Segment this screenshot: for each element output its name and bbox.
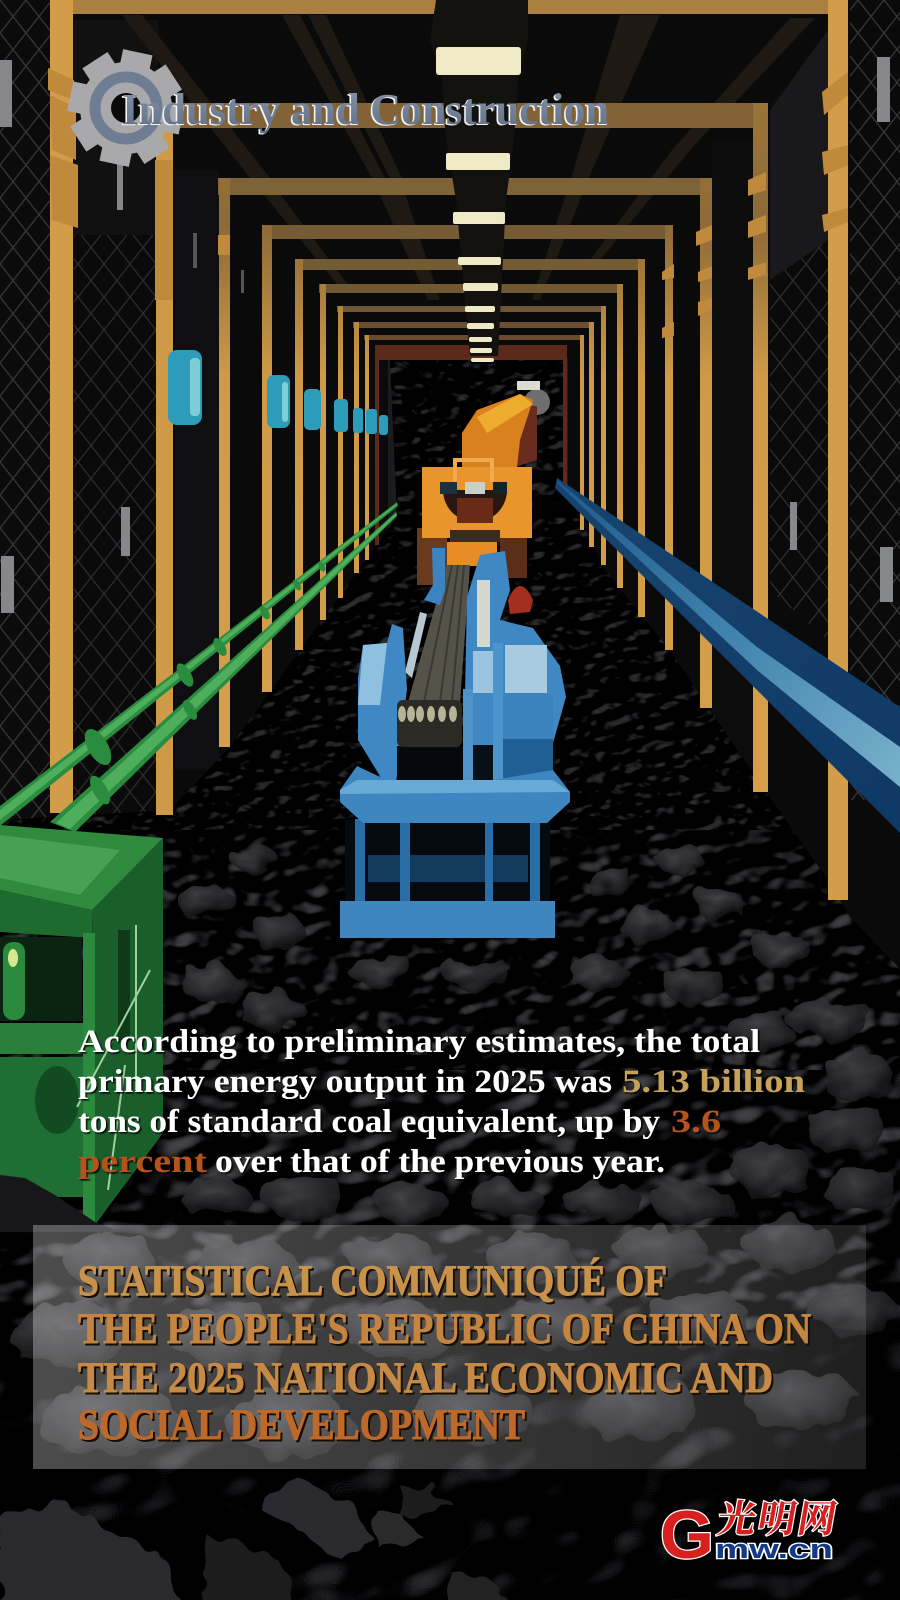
frame 9: [364, 335, 584, 560]
blue conveyor machine: [340, 548, 570, 823]
small blue roller left: [424, 548, 445, 605]
frame 5: [295, 259, 645, 650]
teal wall lamps: [168, 350, 388, 435]
conveyor base plate: [340, 901, 555, 938]
gear icon: [58, 40, 194, 176]
body paragraph: According to preliminary estimates, the total: [78, 1024, 760, 1060]
orange mining machine: [417, 381, 550, 585]
logo: gmw.cn: mw.cn: [715, 1534, 833, 1564]
banner heading: [78, 1258, 811, 1449]
legs: [417, 528, 447, 585]
body paragraph: primary energy output in 2025 was: [78, 1064, 612, 1100]
white bar: [477, 580, 490, 647]
logo: gmw.cn: 光明网: [714, 1498, 840, 1541]
frame 6: [319, 284, 623, 620]
green cabinet: [0, 825, 163, 1225]
blue rail: [555, 478, 900, 833]
logo: gmw.cn: G: [660, 1497, 714, 1573]
frame 2: [155, 103, 768, 815]
highlight: percent: percent: [78, 1144, 207, 1180]
conveyor belt: [408, 565, 470, 702]
frame 3: [218, 178, 712, 747]
banner heading: THE 2025 NATIONAL ECONOMIC AND: [78, 1355, 773, 1402]
machine arm: [462, 381, 550, 467]
drum: [397, 700, 462, 747]
highlight: 3.6: 3.6: [671, 1104, 721, 1140]
body paragraph: [78, 1024, 805, 1180]
post cleats: [48, 68, 848, 338]
frame 7: [337, 306, 606, 598]
highlight: 5.13 billion: 5.13 billion: [622, 1064, 805, 1100]
body paragraph: tons of standard coal equivalent, up by: [78, 1104, 661, 1140]
banner heading: THE PEOPLE'S REPUBLIC OF CHINA ON: [78, 1306, 811, 1353]
large coal chunks at the bottom: [0, 1480, 510, 1600]
frame 10 red far end: [375, 345, 567, 545]
ceiling lights: [436, 47, 521, 362]
ceiling light fixture housing: [430, 0, 528, 356]
frame 8: [353, 322, 594, 573]
red shield: [508, 586, 533, 614]
frame 1: [50, 0, 848, 900]
conveyor base legs: [345, 819, 550, 905]
cavity under drum: [397, 746, 463, 786]
right hood: [463, 551, 566, 792]
ceiling slats converging to the vanishing point: [122, 15, 815, 300]
silver bar: [405, 612, 427, 678]
machine body: [422, 460, 532, 566]
dark coal pile bottom left: [0, 1175, 120, 1232]
coal floor: [0, 360, 900, 1600]
light blocks: [505, 645, 547, 693]
logo: gmw.cn: [660, 1497, 840, 1573]
coal pile at the far end of the tunnel: [388, 358, 568, 528]
wall plates: [0, 57, 893, 613]
platform: [340, 766, 570, 823]
title: Industry and Construction: [122, 85, 609, 134]
body paragraph: over that of the previous year.: [215, 1144, 665, 1180]
individual coal lumps on the floor: [14, 847, 896, 1459]
left and right walls with wire mesh: [0, 0, 900, 830]
left housing: [358, 624, 407, 792]
green pipes: [0, 502, 398, 832]
frame 4: [262, 225, 673, 692]
translucent heading banner: [33, 1225, 866, 1469]
banner heading: SOCIAL DEVELOPMENT: [78, 1402, 525, 1449]
banner heading: STATISTICAL COMMUNIQUÉ OF: [78, 1258, 667, 1305]
wooden tunnel frames: [48, 0, 848, 900]
